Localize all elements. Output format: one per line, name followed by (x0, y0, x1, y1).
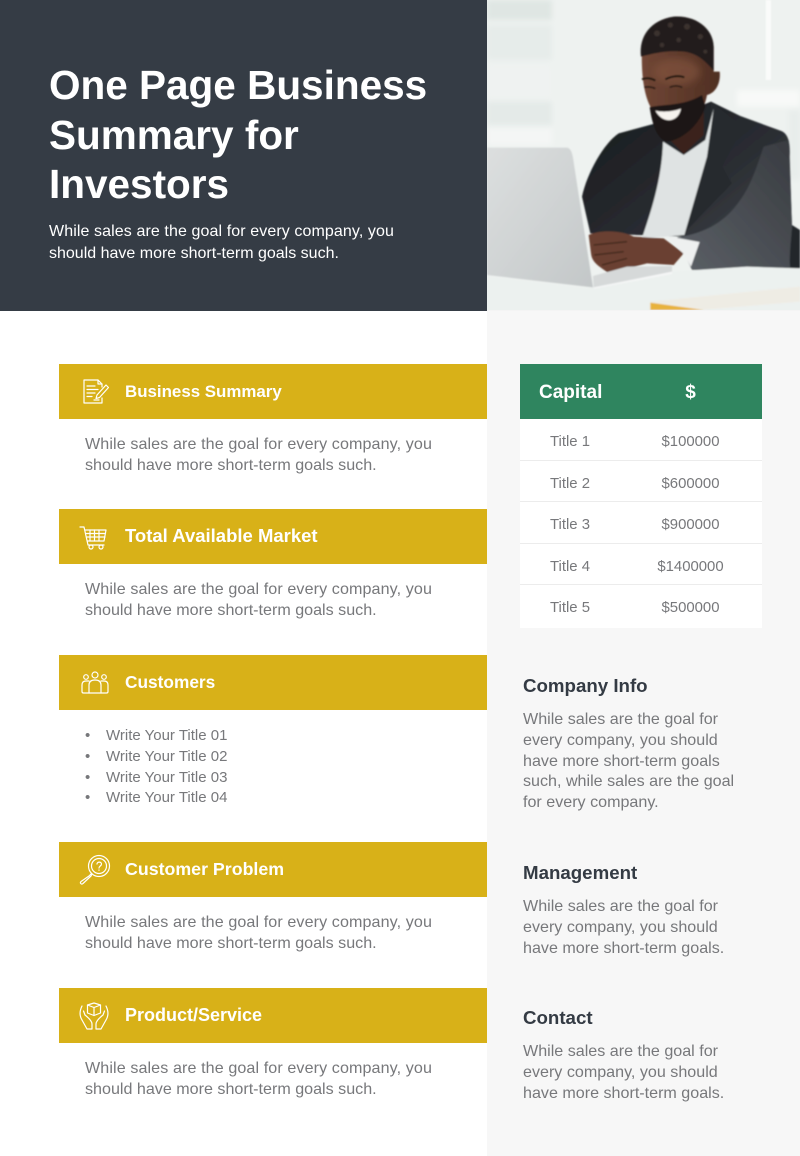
heading text: Total Available Market (125, 525, 318, 546)
text: Company Info: While sales are the goal for (523, 710, 718, 728)
heading bar (59, 842, 487, 897)
head (642, 47, 720, 136)
text: Contact: While sales are the goal for (523, 1042, 718, 1060)
heading text: Customer Problem (125, 859, 284, 879)
hair (641, 17, 714, 71)
text: Contact (523, 1042, 724, 1102)
text: Contact: every company, you should (523, 1063, 718, 1081)
text: Company Info (523, 710, 734, 811)
smile (655, 109, 681, 120)
text: Company Info: have more short-term goals (523, 752, 720, 770)
body text: While sales are the goal for every company, you (85, 1059, 432, 1077)
lapel (684, 102, 742, 233)
table header: $ (685, 382, 696, 403)
table header: Capital (539, 382, 602, 403)
bullet list: Write Your Title 04 (106, 789, 227, 806)
bullet list: • (85, 789, 90, 806)
shirt (642, 108, 714, 238)
beard (650, 95, 705, 142)
icon: shopping cart (79, 526, 107, 550)
table rows: Title 4 (550, 558, 590, 574)
icon: magnifier with question mark (80, 854, 110, 885)
body text: should have more short-term goals such. (85, 1080, 377, 1098)
section: Customers (59, 655, 487, 806)
icon: people group (81, 671, 109, 694)
table rows: $500000 (662, 600, 719, 616)
laptop screen (487, 148, 593, 287)
subtitle: While sales are the goal for every company, you (49, 223, 394, 240)
heading text: Customers (125, 672, 215, 692)
bullet list: Write Your Title 01 (106, 727, 227, 744)
eyes (644, 86, 682, 89)
title (49, 62, 427, 207)
bullet list: • (85, 727, 90, 744)
cheek highlight (654, 58, 700, 85)
body text (85, 580, 432, 619)
table rows: Title 1 (550, 434, 590, 450)
body text: should have more short-term goals such. (85, 934, 377, 952)
table rows: $600000 (662, 476, 719, 492)
body text: While sales are the goal for every company, you (85, 580, 432, 598)
text: Company Info: for every company. (523, 793, 659, 811)
heading bar (59, 509, 487, 564)
body text (85, 913, 432, 952)
icon: document with pen (83, 379, 110, 404)
subtitle: should have more short-term goals such. (49, 244, 339, 262)
right column background (487, 311, 800, 1156)
heading text: Business Summary (125, 382, 282, 401)
table (487, 267, 800, 311)
text: Company Info: every company, you should (523, 731, 718, 749)
body text: should have more short-term goals such. (85, 601, 377, 619)
icon: hands holding box (79, 1002, 109, 1030)
body text (85, 1059, 432, 1098)
text: Company Info: such, while sales are the goal (523, 772, 734, 790)
table rows: $100000 (662, 434, 719, 450)
table header (520, 364, 762, 419)
bullet list: • (85, 769, 90, 786)
bullet list: Write Your Title 02 (106, 748, 227, 765)
table rows: $900000 (662, 517, 719, 533)
heading bar (59, 364, 487, 419)
table rows (520, 434, 762, 616)
text: Management (523, 897, 724, 957)
subtitle (49, 223, 394, 262)
heading: Management: Management (523, 862, 637, 883)
sleeve (677, 140, 792, 270)
body text: While sales are the goal for every company, you (85, 435, 432, 453)
table rows: Title 5 (550, 600, 590, 616)
text: Management: While sales are the goal for (523, 897, 718, 915)
body text: While sales are the goal for every company, you (85, 913, 432, 931)
section: Business Summary (59, 364, 487, 474)
bullet list (85, 727, 228, 806)
laptop keyboard (593, 266, 672, 287)
body text: should have more short-term goals such. (85, 456, 377, 474)
text: Contact: have more short-term goals. (523, 1084, 724, 1102)
section: Total Available Market (59, 509, 487, 619)
heading text: Product/Service (125, 1005, 262, 1025)
neck (664, 103, 704, 154)
hand (589, 231, 684, 273)
table rows: Title 3 (550, 517, 590, 533)
section: Customer Problem (59, 842, 487, 952)
table rows: Title 2 (550, 476, 590, 492)
title: One Page Business (49, 62, 427, 108)
title: Investors (49, 161, 229, 207)
chair (784, 225, 800, 268)
body text (85, 435, 432, 474)
shirt cuff (667, 236, 700, 267)
heading bar (59, 988, 487, 1043)
jacket (582, 102, 792, 270)
bullet list: Write Your Title 03 (106, 769, 227, 786)
text: Management: have more short-term goals. (523, 939, 724, 957)
heading bar (59, 655, 487, 710)
heading: Contact: Contact (523, 1007, 593, 1028)
header panel (0, 0, 487, 311)
table rows: $1400000 (657, 558, 724, 574)
text: Management: every company, you should (523, 918, 718, 936)
photo: businessman at laptop (487, 0, 800, 311)
section: Product/Service (59, 988, 487, 1098)
capital table (520, 364, 762, 616)
bullet list: • (85, 748, 90, 765)
heading: Company Info: Company Info (523, 675, 648, 696)
title: Summary for (49, 112, 299, 158)
